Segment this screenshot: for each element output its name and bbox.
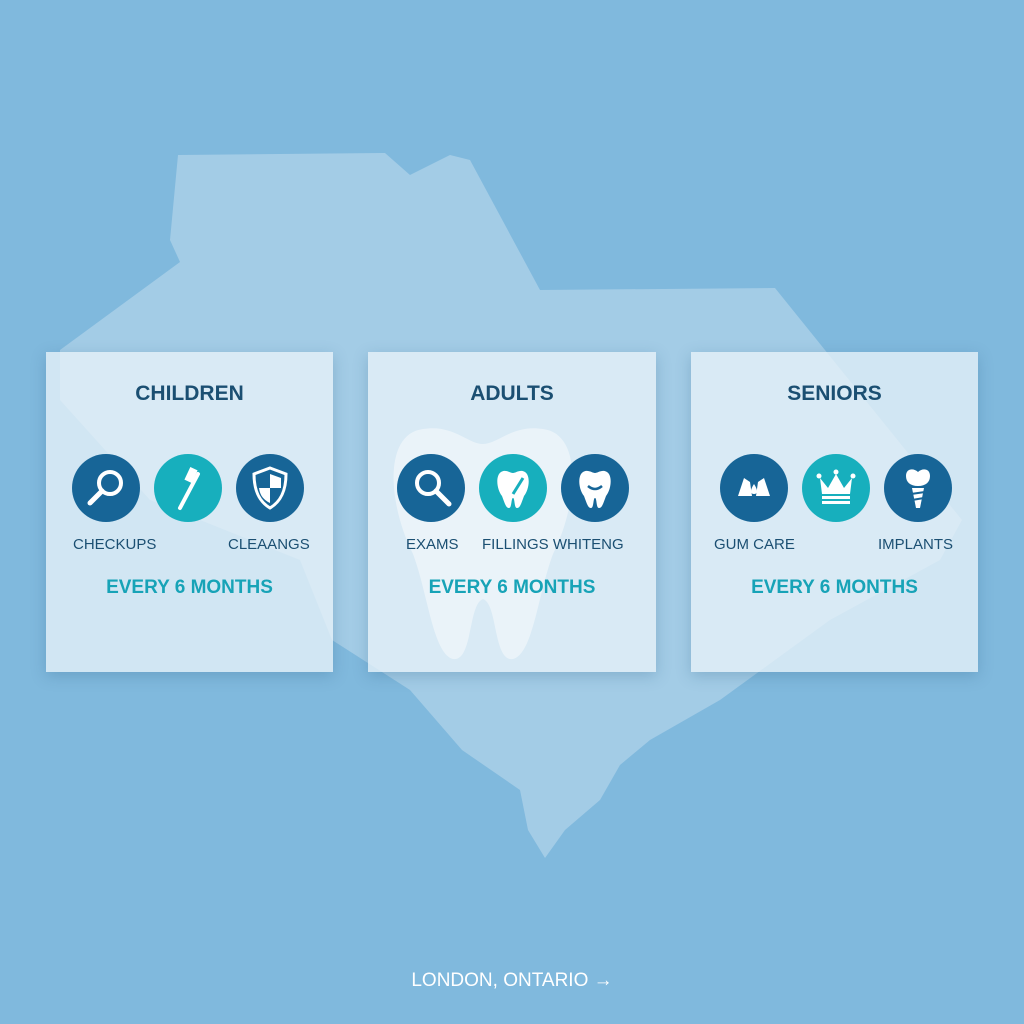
card: adults: [368, 352, 656, 672]
icon: crown: [802, 454, 870, 522]
icon: whitening tooth: [561, 454, 629, 522]
icon: shield: [236, 454, 304, 522]
label: cleaangs: CLEAANGS: [228, 536, 310, 553]
icon: magnifier: [72, 454, 140, 522]
heading: seniors: SENIORS: [787, 382, 882, 405]
icon: exam magnifier: [397, 454, 465, 522]
label: gum care: GUM CARE: [714, 536, 795, 553]
frequency: seniors: EVERY 6 MONTHS: [751, 577, 918, 598]
watermark tooth: [394, 428, 572, 659]
frequency: adults: EVERY 6 MONTHS: [429, 577, 595, 598]
card: children: [46, 352, 333, 672]
label: exams: EXAMS: [406, 536, 459, 553]
label: fillings whiteng: FILLINGS WHITENG: [482, 536, 624, 553]
footer location: LONDON, ONTARIO →: [411, 970, 613, 991]
icon: toothbrush: [154, 454, 222, 522]
frequency: children: EVERY 6 MONTHS: [106, 577, 273, 598]
label: implants: IMPLANTS: [878, 536, 953, 553]
icon: implant: [884, 454, 952, 522]
card: seniors: [691, 352, 978, 672]
label: checkups: CHECKUPS: [73, 536, 156, 553]
heading: adults: ADULTS: [470, 382, 554, 405]
heading: children: CHILDREN: [135, 382, 244, 405]
icon: gum care: [720, 454, 788, 522]
icon: filling tooth: [479, 454, 547, 522]
